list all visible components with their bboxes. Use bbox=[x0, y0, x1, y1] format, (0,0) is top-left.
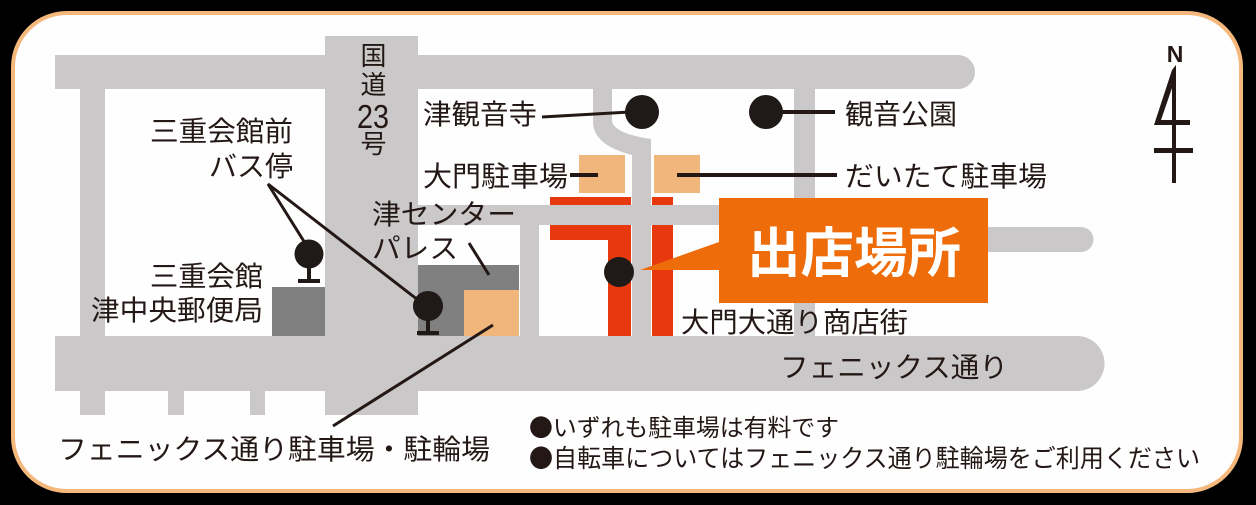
icon: north compass bbox=[1154, 41, 1193, 183]
marker: Kannon park bbox=[749, 95, 783, 129]
line: Kannonji bbox=[542, 112, 630, 117]
line: Daitate parking bbox=[677, 173, 837, 177]
parking: Daimon bbox=[579, 155, 625, 193]
marker: shop location bbox=[604, 257, 634, 287]
parking: Daitate bbox=[654, 155, 700, 193]
label: Kannonji: 津観音寺 bbox=[423, 99, 537, 130]
label: Daimon parking: 大門駐車場 bbox=[423, 161, 568, 192]
callout heading: 出店場所 bbox=[747, 224, 961, 284]
label: route 23: 道 bbox=[360, 70, 387, 100]
line: Phoenix parking bbox=[333, 325, 493, 426]
label: Tsu Center line one: 津センター bbox=[372, 199, 516, 230]
label: Mie hall bus stop line two: バス停 bbox=[209, 151, 293, 182]
leader lines bbox=[268, 112, 837, 426]
road: Phoenix street bbox=[55, 336, 1104, 391]
arcade: lower right segment bbox=[652, 225, 673, 336]
arcade: lower left segment bbox=[550, 225, 631, 336]
line: Daimon parking bbox=[570, 173, 598, 177]
line: bus stop pair bbox=[268, 184, 418, 300]
label: Kannon park: 観音公園 bbox=[845, 99, 957, 130]
building: Mie hall and post office bbox=[272, 287, 325, 336]
label: Daitate parking: だいたて駐車場 bbox=[845, 161, 1047, 192]
label: route 23: 23 bbox=[357, 98, 389, 135]
label: route 23: 国 bbox=[360, 41, 387, 71]
label: Mie hall: 三重会館 bbox=[150, 261, 263, 292]
road: east branch bbox=[900, 227, 1094, 252]
road: curved arcade road bbox=[593, 89, 651, 336]
building: Tsu Center Palace bbox=[418, 265, 519, 336]
label: Daimon shopping street: 大門大通り商店街 bbox=[681, 307, 908, 338]
line: Kannon park bbox=[770, 110, 835, 114]
road: short stub two bbox=[250, 391, 265, 415]
road: middle horizontal bbox=[418, 205, 820, 225]
callout: shop location bbox=[640, 198, 988, 303]
icon: bus stop lower bbox=[413, 291, 443, 335]
road: top horizontal bbox=[55, 55, 975, 89]
road: short vertical bbox=[520, 205, 539, 336]
roads bbox=[55, 36, 1104, 415]
icon: bus stop upper bbox=[295, 240, 323, 283]
label: Phoenix parking: フェニックス通り駐車場・駐輪場 bbox=[58, 434, 490, 465]
compass needle bbox=[1154, 65, 1193, 183]
road: national route 23 bbox=[325, 36, 418, 415]
label: Palace line two: パレス bbox=[372, 233, 458, 264]
label: route 23 bbox=[357, 41, 389, 159]
line: Center Palace bbox=[469, 243, 489, 275]
arcade: upper left segment bbox=[550, 197, 631, 205]
label: Tsu central post office: 津中央郵便局 bbox=[91, 295, 263, 326]
label: Mie hall bus stop line one: 三重会館前 bbox=[150, 116, 293, 147]
road: right vertical bbox=[794, 89, 815, 336]
label: Phoenix street: フェニックス通り bbox=[780, 352, 1008, 383]
callout pointer bbox=[640, 242, 719, 270]
note: bicycle parking: ●自転車についてはフェニックス通り駐輪場をご利用ください bbox=[529, 439, 1200, 475]
parking: Phoenix street bbox=[464, 290, 519, 336]
arcade: upper right segment bbox=[652, 197, 673, 205]
road: short stub one bbox=[168, 391, 184, 415]
buildings bbox=[272, 155, 700, 336]
callout box bbox=[719, 198, 988, 303]
marker: Kannonji bbox=[625, 95, 659, 129]
north letter: N bbox=[1167, 41, 1183, 67]
location markers bbox=[295, 95, 783, 335]
road: left vertical bbox=[80, 55, 105, 415]
note: parking is paid: ●いずれも駐車場は有料です bbox=[529, 408, 839, 443]
red arcade shopping street bbox=[550, 197, 673, 336]
label: route 23: 号 bbox=[360, 129, 387, 159]
